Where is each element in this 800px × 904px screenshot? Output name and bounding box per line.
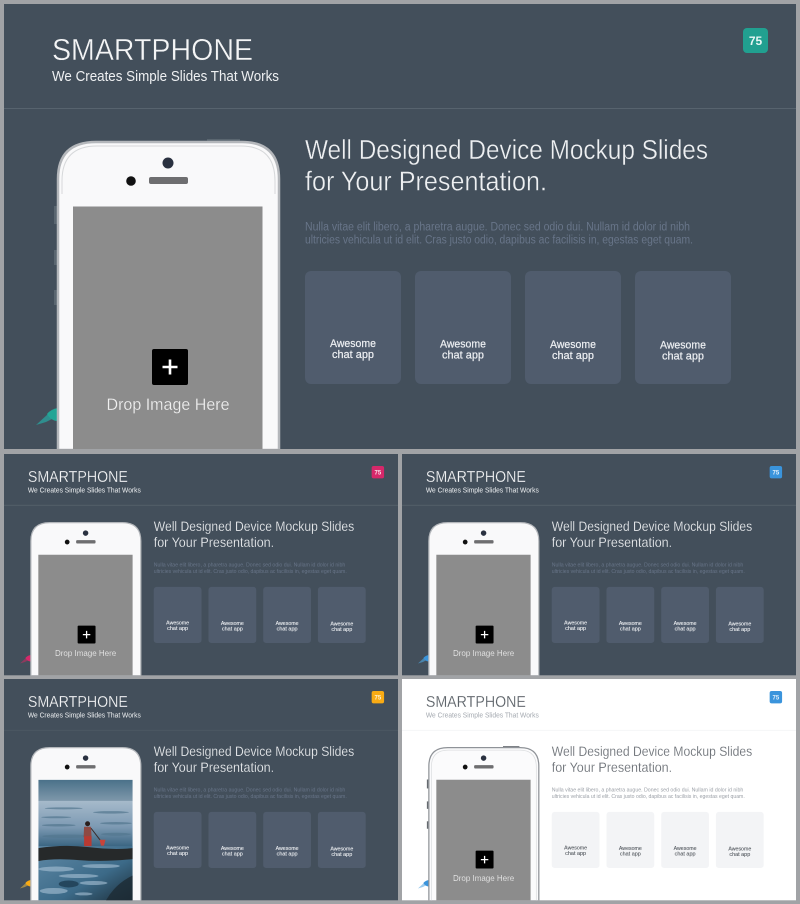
card 4: Awesome — [728, 846, 751, 852]
card 4: Awesome — [330, 846, 353, 852]
body text: Nulla vitae elit libero, a pharetra augue. Donec sed odio dui. Nullam id dolor id nibh — [552, 563, 743, 569]
card 2: Awesome — [221, 621, 244, 627]
body text — [154, 563, 347, 575]
card 3: Awesome — [276, 846, 299, 852]
badge: page number: 75 — [375, 695, 382, 701]
card 3: Awesome — [276, 621, 299, 627]
heading: for Your Presentation. — [552, 759, 672, 775]
card 4: chat app — [331, 852, 352, 858]
card 1: Awesome — [166, 846, 189, 852]
card 3: chat app — [675, 627, 696, 633]
card 2: chat app — [222, 626, 243, 632]
card 4: Awesome — [660, 340, 706, 352]
icon: yellow pin mark — [20, 880, 31, 888]
card 4: chat app — [662, 350, 704, 362]
heading — [305, 139, 708, 191]
heading: for Your Presentation. — [154, 534, 274, 550]
heading: for Your Presentation. — [305, 166, 547, 196]
card 2: chat app — [620, 851, 641, 857]
card 1: Awesome — [330, 338, 376, 350]
badge: page number: 75 — [375, 470, 382, 476]
body text: Nulla vitae elit libero, a pharetra augue. Donec sed odio dui. Nullam id dolor id nibh — [305, 222, 690, 234]
badge: page number — [770, 466, 782, 478]
body text: ultricies vehicula ut id elit. Cras justo odio, dapibus ac facilisis in, egestas eget quam. — [552, 569, 745, 575]
heading: Well Designed Device Mockup Slides — [552, 743, 752, 759]
panel: small light slide, blue badge — [402, 679, 796, 901]
badge: page number — [743, 28, 768, 53]
card 2: Awesome — [221, 846, 244, 852]
heading — [552, 521, 752, 547]
body text: ultricies vehicula ut id elit. Cras justo odio, dapibus ac facilisis in, egestas eget quam. — [552, 794, 745, 800]
heading — [552, 743, 752, 775]
heading: for Your Presentation. — [154, 759, 274, 775]
card 3: chat app — [277, 852, 298, 858]
subtitle: We Creates Simple Slides That Works — [28, 710, 141, 719]
card 1: chat app — [332, 349, 374, 361]
phone mockup: Drop Image Here — [453, 873, 514, 883]
body text — [552, 788, 745, 800]
phone mockup: Drop Image Here — [55, 648, 116, 658]
title: SMARTPHONE — [28, 694, 128, 711]
card 1: chat app — [565, 851, 586, 857]
title: SMARTPHONE — [28, 469, 128, 486]
card 4: Awesome — [330, 621, 353, 627]
body text: Nulla vitae elit libero, a pharetra augue. Donec sed odio dui. Nullam id dolor id nibh — [154, 788, 345, 794]
phone mockup — [31, 523, 141, 676]
phone mockup — [54, 139, 279, 450]
card 4: chat app — [729, 852, 750, 858]
card 3: chat app — [277, 627, 298, 633]
card 4: chat app — [331, 627, 352, 633]
card 3: Awesome — [674, 846, 697, 852]
body text: Nulla vitae elit libero, a pharetra augue. Donec sed odio dui. Nullam id dolor id nibh — [552, 788, 743, 794]
badge: page number — [372, 691, 384, 703]
panel: small slide, blue badge — [402, 454, 796, 676]
card 3 — [661, 587, 709, 643]
card 1 — [154, 812, 202, 868]
panel: small slide with photo, yellow badge — [4, 679, 398, 901]
title: SMARTPHONE — [426, 694, 526, 711]
icon: pink pin mark — [20, 655, 31, 663]
card 1 — [552, 812, 600, 868]
card 1: Awesome — [564, 621, 587, 627]
card 3 — [525, 271, 621, 384]
heading: for Your Presentation. — [552, 534, 672, 550]
card 1: chat app — [167, 851, 188, 857]
card 2 — [208, 587, 256, 643]
icon: blue pin mark — [418, 880, 429, 888]
card 3: Awesome — [550, 339, 596, 351]
heading: Well Designed Device Mockup Slides — [154, 518, 354, 534]
card 2 — [606, 587, 654, 643]
heading — [154, 743, 354, 775]
card 3 — [263, 587, 311, 643]
body text: ultricies vehicula ut id elit. Cras justo odio, dapibus ac facilisis in, egestas eget quam. — [154, 569, 347, 575]
card 1: Awesome — [564, 846, 587, 852]
card 2: chat app — [222, 851, 243, 857]
heading — [154, 521, 354, 547]
card 3: chat app — [552, 350, 594, 362]
card 2: chat app — [442, 350, 484, 362]
card 4: chat app — [729, 627, 750, 633]
heading: Well Designed Device Mockup Slides — [305, 134, 708, 165]
panel: small slide, pink badge — [4, 454, 398, 676]
body text: Nulla vitae elit libero, a pharetra augue. Donec sed odio dui. Nullam id dolor id nibh — [154, 563, 345, 569]
card 1: chat app — [565, 626, 586, 632]
card 3 — [263, 812, 311, 868]
card 4 — [716, 587, 764, 643]
title: SMARTPHONE — [52, 32, 253, 67]
badge: page number: 75 — [773, 470, 780, 476]
phone mockup: Drop Image Here — [106, 395, 230, 414]
card 3 — [661, 812, 709, 868]
icon: teal pin mark — [36, 408, 58, 425]
card 2: chat app — [620, 626, 641, 632]
icon: blue pin mark — [418, 655, 429, 663]
card 2 — [606, 812, 654, 868]
badge: page number — [372, 466, 384, 478]
body text — [552, 563, 745, 575]
body text — [305, 222, 693, 246]
card 1 — [154, 587, 202, 643]
card 2 — [208, 812, 256, 868]
card 4 — [716, 812, 764, 868]
heading: Well Designed Device Mockup Slides — [552, 518, 752, 534]
card 1: chat app — [167, 626, 188, 632]
phone mockup — [429, 523, 539, 676]
photo: paddler in the sea — [38, 780, 133, 900]
card 3: Awesome — [674, 621, 697, 627]
title: SMARTPHONE — [426, 469, 526, 486]
card 2: Awesome — [619, 846, 642, 852]
subtitle: We Creates Simple Slides That Works — [426, 710, 539, 719]
phone mockup with photo — [31, 748, 141, 901]
badge: page number: 75 — [773, 695, 780, 701]
card 4 — [635, 271, 731, 384]
card 2 — [415, 271, 511, 384]
badge: page number: 75 — [749, 34, 762, 48]
body text: ultricies vehicula ut id elit. Cras justo odio, dapibus ac facilisis in, egestas eget quam. — [305, 234, 693, 246]
card 3: chat app — [675, 852, 696, 858]
card 2: Awesome — [440, 338, 486, 350]
subtitle: We Creates Simple Slides That Works — [52, 69, 279, 85]
body text: ultricies vehicula ut id elit. Cras justo odio, dapibus ac facilisis in, egestas eget quam. — [154, 794, 347, 800]
card 1 — [305, 271, 401, 384]
phone mockup: Drop Image Here — [453, 648, 514, 658]
phone mockup — [427, 746, 539, 901]
card 4 — [318, 812, 366, 868]
card 1: Awesome — [166, 621, 189, 627]
card 4: Awesome — [728, 621, 751, 627]
subtitle: We Creates Simple Slides That Works — [426, 485, 539, 494]
badge: page number — [770, 691, 782, 703]
card 2: Awesome — [619, 621, 642, 627]
panel: large slide, teal badge — [4, 4, 796, 450]
card 1 — [552, 587, 600, 643]
heading: Well Designed Device Mockup Slides — [154, 743, 354, 759]
subtitle: We Creates Simple Slides That Works — [28, 485, 141, 494]
card 4 — [318, 587, 366, 643]
body text — [154, 788, 347, 800]
